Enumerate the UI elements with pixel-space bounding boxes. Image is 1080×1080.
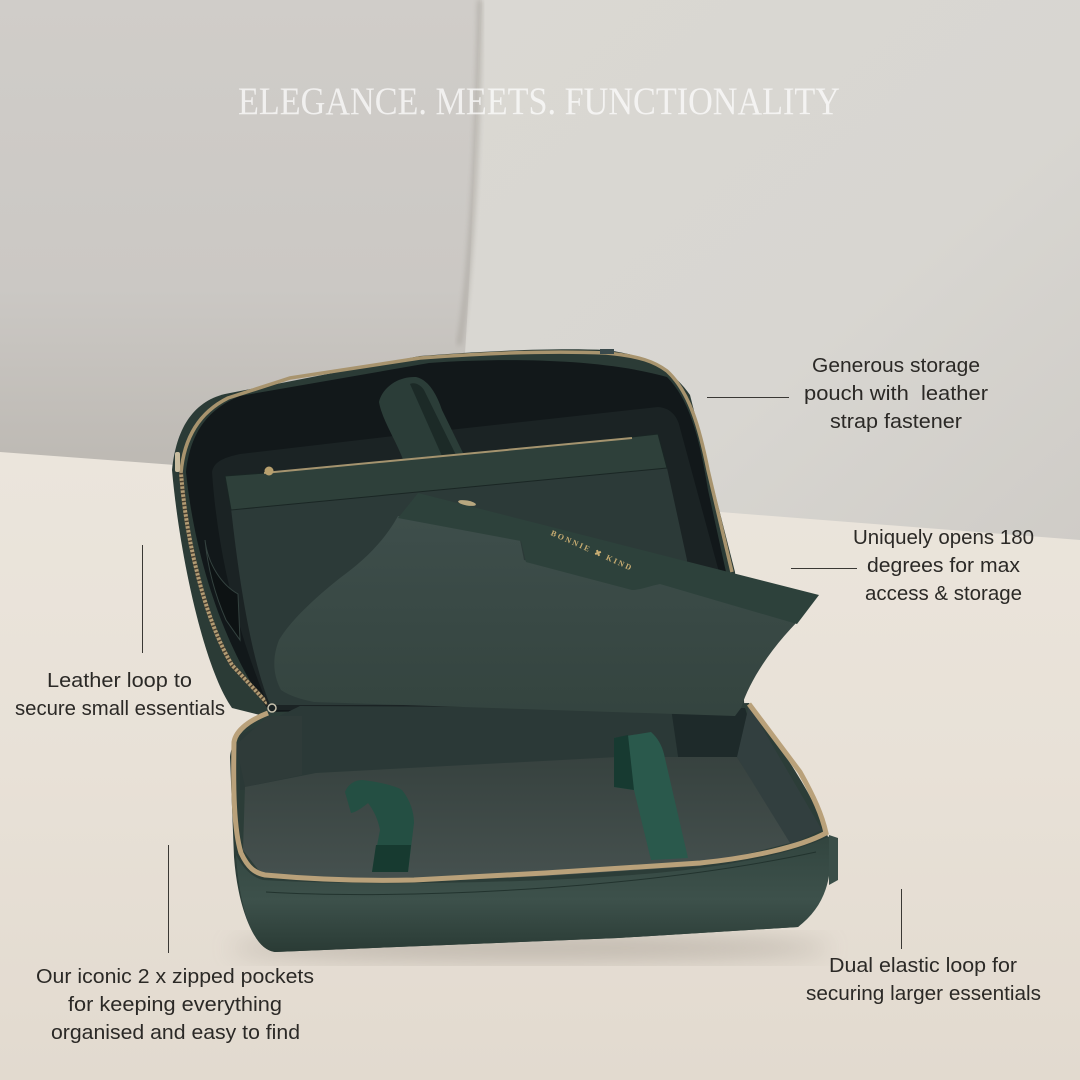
title: ELEGANCE. MEETS. FUNCTIONALITY xyxy=(238,80,840,123)
callout: opens 180 degrees: Uniquely opens 180 xyxy=(853,527,1034,549)
callout: zipped pockets: for keeping everything xyxy=(68,994,282,1016)
lower zip xyxy=(234,704,826,880)
lower floor lining xyxy=(243,757,790,882)
front pocket flap canvas xyxy=(274,516,797,716)
zipped rear pocket leather band xyxy=(225,434,667,510)
lower front wall xyxy=(236,836,831,952)
callout: leather loop xyxy=(15,545,225,720)
callout: storage pouch: strap fastener xyxy=(830,411,962,433)
callout: zipped pockets: organised and easy to find xyxy=(51,1022,300,1044)
callout: storage pouch: Generous storage xyxy=(812,355,980,377)
logo on flap: BONNIE ✖ KIND xyxy=(549,528,635,573)
leather strap xyxy=(379,377,464,462)
zipped rear pocket canvas xyxy=(231,468,687,705)
right elastic loop xyxy=(614,732,688,860)
callout: opens 180 degrees xyxy=(791,527,1034,605)
callout: storage pouch: pouch with leather xyxy=(804,383,988,405)
callout: leather loop: secure small essentials xyxy=(15,698,225,720)
lower left corner wall xyxy=(236,716,302,787)
leather loop inside upper xyxy=(205,540,240,640)
lower right side wall xyxy=(737,705,822,845)
callout: zipped pockets xyxy=(36,845,314,1044)
callout: leather loop: Leather loop to xyxy=(47,670,192,692)
storage pouch panel xyxy=(212,407,719,710)
upper shell xyxy=(172,349,745,715)
product: open green toiletry bag xyxy=(172,349,838,959)
lower shell outer xyxy=(230,703,829,952)
callout: opens 180 degrees: access & storage xyxy=(865,583,1022,605)
left elastic loop xyxy=(345,780,414,872)
callout: storage pouch xyxy=(707,355,988,433)
top strap tab xyxy=(600,349,614,354)
callout: dual elastic loop: securing larger essentials xyxy=(806,983,1041,1005)
metal ring left xyxy=(175,452,180,472)
right zip pull tab xyxy=(829,835,838,885)
front pocket flap leather band xyxy=(398,493,819,624)
callout: opens 180 degrees: degrees for max xyxy=(867,555,1020,577)
zip pull on flap xyxy=(458,499,476,507)
zip pull rear pocket xyxy=(264,466,274,476)
callout: dual elastic loop: Dual elastic loop for xyxy=(829,955,1017,977)
upper lining xyxy=(186,360,730,712)
silver ring at hinge xyxy=(268,704,276,712)
callout: zipped pockets: Our iconic 2 x zipped pockets xyxy=(36,966,314,988)
lower back wall xyxy=(240,706,760,790)
callout: dual elastic loop xyxy=(806,889,1041,1005)
bag shadow xyxy=(230,937,830,959)
upper zip xyxy=(181,352,732,704)
